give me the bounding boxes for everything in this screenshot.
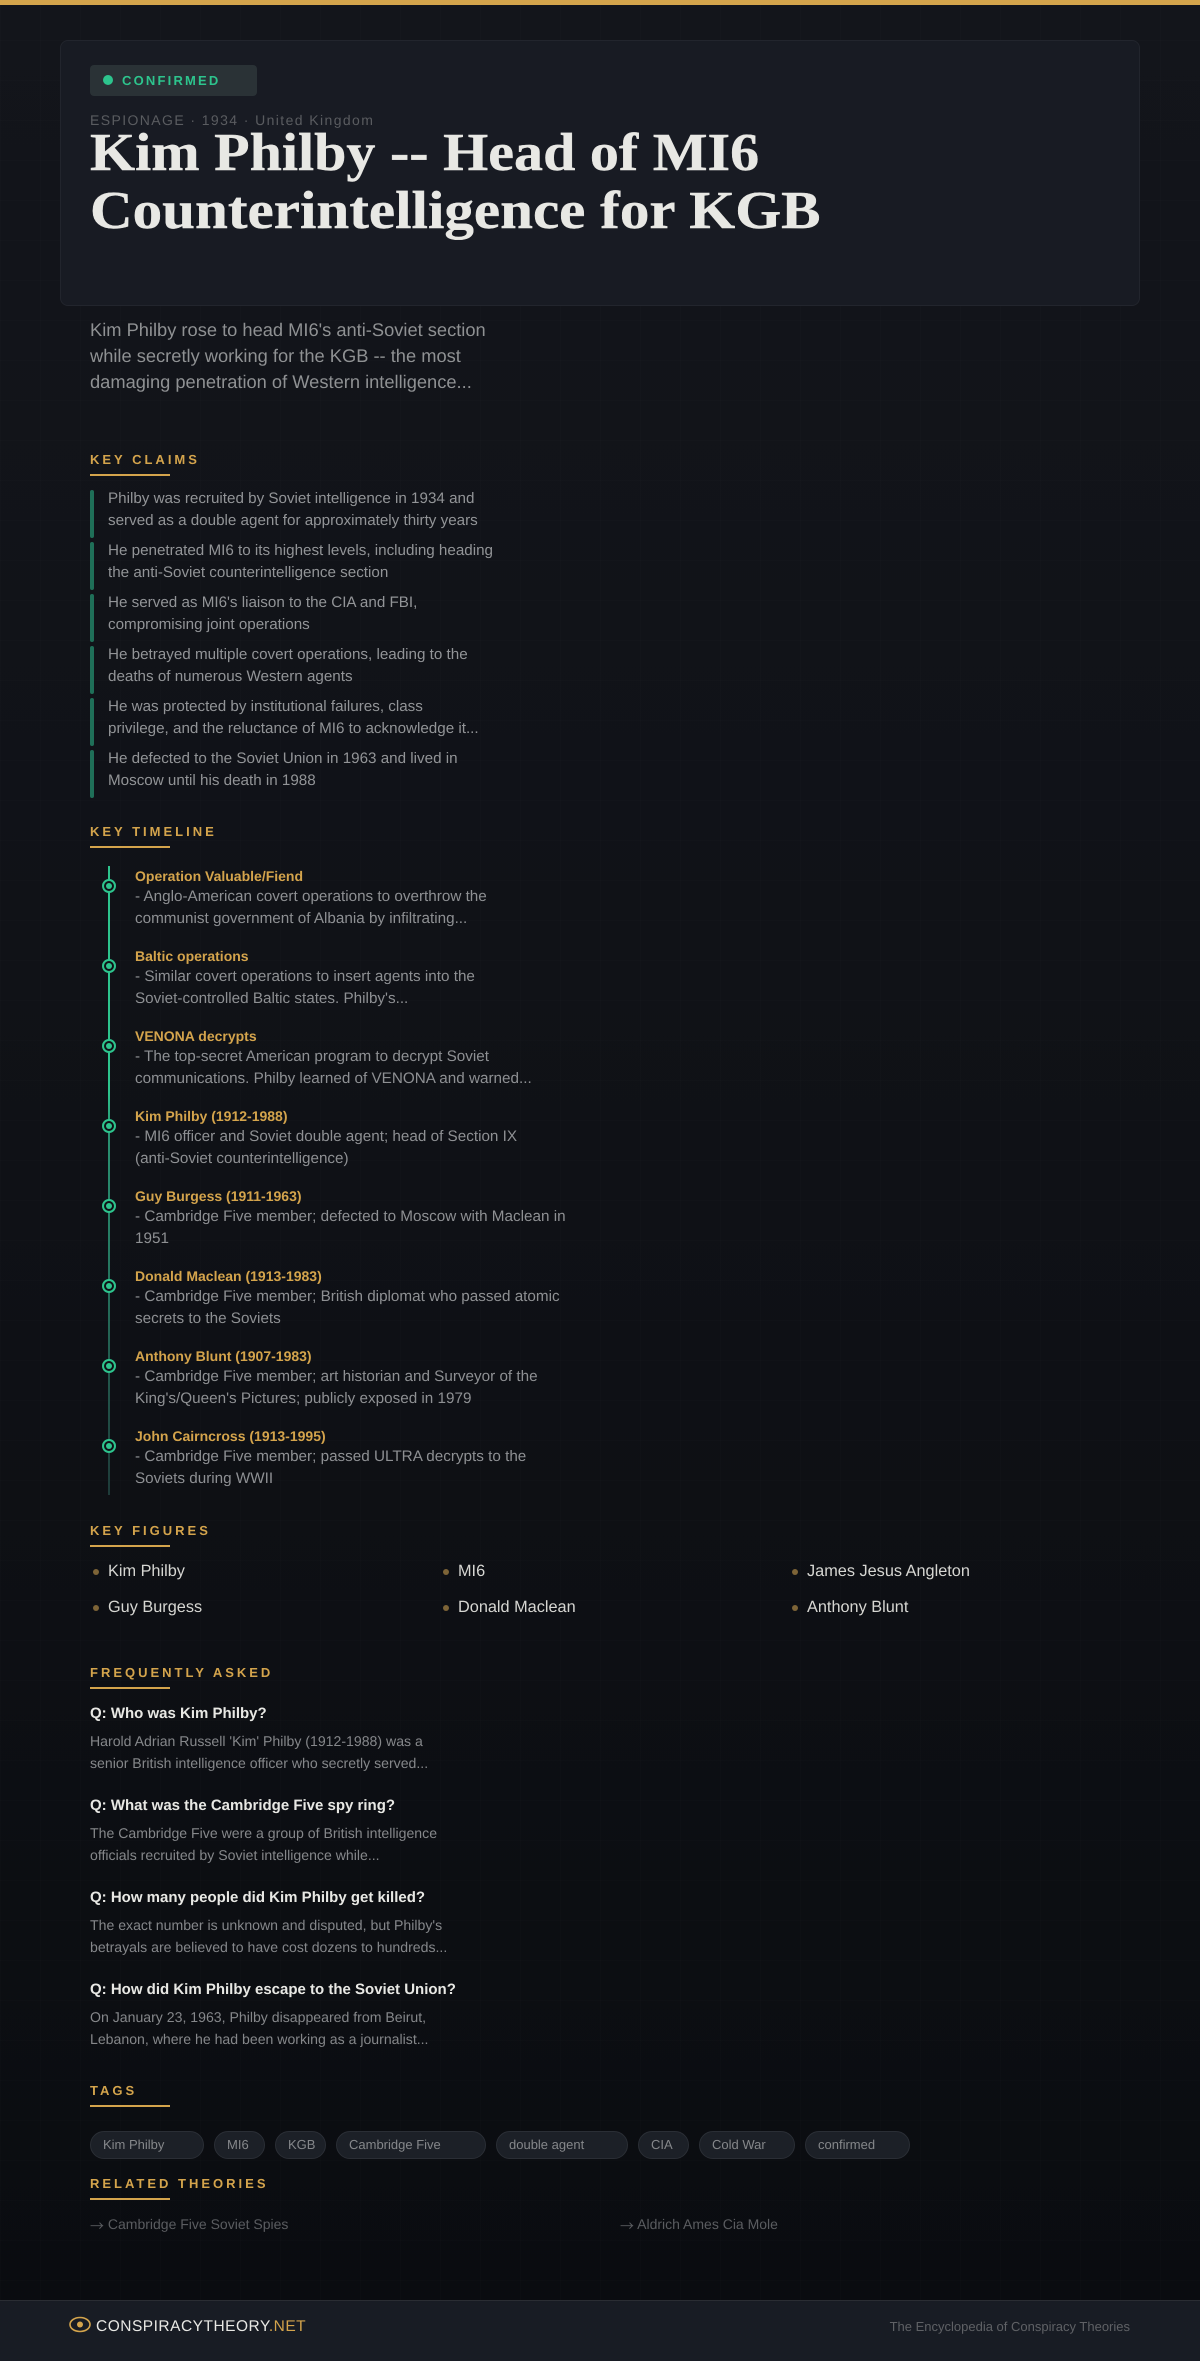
intro summary: Kim Philby rose to head MI6's anti-Soviet section <box>90 319 486 340</box>
title: Kim Philby -- Head of MI6 <box>90 122 759 182</box>
question 4: On January 23, 1963, Philby disappeared from Beirut, <box>90 2009 426 2025</box>
claim 2: the anti-Soviet counterintelligence section <box>108 564 388 581</box>
event 4 <box>135 1108 517 1167</box>
tag <box>805 2131 910 2159</box>
claim 1: Philby was recruited by Soviet intelligence in 1934 and <box>108 490 474 507</box>
panel: header <box>60 40 1140 306</box>
tag: CIA <box>651 2137 673 2152</box>
question 1: senior British intelligence officer who secretly served... <box>90 1755 428 1771</box>
claim 6: He defected to the Soviet Union in 1963 and lived in <box>108 750 458 767</box>
event 7: - Cambridge Five member; art historian and Surveyor of the <box>135 1368 538 1385</box>
question 1: Q: Who was Kim Philby? <box>90 1705 267 1722</box>
tag <box>699 2131 795 2159</box>
event 7 <box>135 1348 538 1407</box>
claim 2 <box>90 542 493 590</box>
event 7: Anthony Blunt (1907-1983) <box>135 1348 312 1364</box>
event 6: - Cambridge Five member; British diplomat who passed atomic <box>135 1288 560 1305</box>
footer <box>0 2300 1200 2361</box>
event 1 <box>135 868 487 927</box>
node 4 <box>102 1119 116 1133</box>
timeline <box>102 866 566 1495</box>
question 3: The exact number is unknown and disputed, but Philby's <box>90 1917 442 1933</box>
claim 5: He was protected by institutional failures, class <box>108 698 423 715</box>
event 6: Donald Maclean (1913-1983) <box>135 1268 322 1284</box>
panel: key claims list <box>90 490 493 798</box>
event 3: VENONA decrypts <box>135 1028 257 1044</box>
tag <box>275 2131 326 2159</box>
tag: Kim Philby <box>103 2137 164 2152</box>
tag: confirmed <box>818 2137 875 2152</box>
event 5: - Cambridge Five member; defected to Moscow with Maclean in <box>135 1208 566 1225</box>
figure: Kim Philby: Kim Philby <box>108 1562 185 1580</box>
event 7: King's/Queen's Pictures; publicly exposed in 1979 <box>135 1390 471 1407</box>
event 3: communications. Philby learned of VENONA and warned... <box>135 1070 532 1087</box>
claim 5: privilege, and the reluctance of MI6 to acknowledge it... <box>108 720 479 737</box>
question 3: Q: How many people did Kim Philby get killed? <box>90 1889 425 1906</box>
badge label: CONFIRMED <box>122 73 221 88</box>
question 2: The Cambridge Five were a group of British intelligence <box>90 1825 437 1841</box>
node 6 <box>102 1279 116 1293</box>
tag: MI6 <box>227 2137 249 2152</box>
question 1 <box>90 1705 428 1771</box>
node 5 <box>102 1199 116 1213</box>
intro summary: while secretly working for the KGB -- the most <box>90 345 461 366</box>
claim 5 <box>90 698 479 746</box>
tag: Cambridge Five <box>349 2137 441 2152</box>
node 1 <box>102 879 116 893</box>
event 6 <box>135 1268 560 1327</box>
claim 1 <box>90 490 478 538</box>
event 8: - Cambridge Five member; passed ULTRA decrypts to the <box>135 1448 526 1465</box>
related link: Cambridge Five Soviet Spies: → Cambridge Five Soviet Spies <box>90 2216 288 2236</box>
tag list <box>90 2131 910 2159</box>
claim 4: deaths of numerous Western agents <box>108 668 353 685</box>
event 2: - Similar covert operations to insert agents into the <box>135 968 475 985</box>
event 3 <box>135 1028 532 1087</box>
tag: double agent <box>509 2137 584 2152</box>
node 2 <box>102 959 116 973</box>
claim 3: compromising joint operations <box>108 616 310 633</box>
event 8: John Cairncross (1913-1995) <box>135 1428 326 1444</box>
title: Counterintelligence for KGB <box>90 180 821 240</box>
claim 3 <box>90 594 417 642</box>
event 6: secrets to the Soviets <box>135 1310 281 1327</box>
event 1: - Anglo-American covert operations to overthrow the <box>135 888 487 905</box>
question 3 <box>90 1889 447 1955</box>
icon: eye logo <box>69 2316 91 2332</box>
question 2 <box>90 1797 437 1863</box>
event 8: Soviets during WWII <box>135 1470 273 1487</box>
figure: MI6: MI6 <box>458 1562 485 1580</box>
timeline rail <box>108 866 110 1495</box>
event 3: - The top-secret American program to decrypt Soviet <box>135 1048 489 1065</box>
heading: key figures: KEY FIGURES <box>90 1523 211 1538</box>
question 4 <box>90 1981 456 2047</box>
event 5 <box>135 1188 566 1247</box>
tag <box>336 2131 486 2159</box>
question 1: Harold Adrian Russell 'Kim' Philby (1912-1988) was a <box>90 1733 423 1749</box>
footer tagline: The Encyclopedia of Conspiracy Theories <box>890 2319 1130 2334</box>
claim 4 <box>90 646 468 694</box>
question 4: Q: How did Kim Philby escape to the Soviet Union? <box>90 1981 456 1998</box>
heading: key timeline: KEY TIMELINE <box>90 824 217 839</box>
event 4: Kim Philby (1912-1988) <box>135 1108 288 1124</box>
node 7 <box>102 1359 116 1373</box>
event 1: Operation Valuable/Fiend <box>135 868 303 884</box>
heading: tags: TAGS <box>90 2083 137 2098</box>
tag <box>214 2131 265 2159</box>
claim 6: Moscow until his death in 1988 <box>108 772 316 789</box>
title <box>90 122 821 240</box>
event 4: (anti-Soviet counterintelligence) <box>135 1150 349 1167</box>
figure: Guy Burgess: Guy Burgess <box>108 1598 202 1616</box>
claim 6 <box>90 750 458 798</box>
event 5: Guy Burgess (1911-1963) <box>135 1188 302 1204</box>
event 1: communist government of Albania by infiltrating... <box>135 910 467 927</box>
claim 4: He betrayed multiple covert operations, leading to the <box>108 646 468 663</box>
icon: status dot <box>103 75 113 85</box>
question 4: Lebanon, where he had been working as a journalist... <box>90 2031 428 2047</box>
faq list <box>90 1705 456 2047</box>
node 3 <box>102 1039 116 1053</box>
tag <box>638 2131 689 2159</box>
event 2 <box>135 948 475 1007</box>
logo wordmark: CONSPIRACYTHEORY.NET <box>96 2318 306 2335</box>
heading: key claims: KEY CLAIMS <box>90 452 200 467</box>
tag <box>496 2131 628 2159</box>
heading: related theories: RELATED THEORIES <box>90 2176 268 2191</box>
claim 1: served as a double agent for approximately thirty years <box>108 512 478 529</box>
figure: James Jesus Angleton: James Jesus Angleton <box>807 1562 970 1580</box>
top accent bar <box>0 0 1200 5</box>
heading: frequently asked: FREQUENTLY ASKED <box>90 1665 273 1680</box>
event 8 <box>135 1428 526 1487</box>
figure: Anthony Blunt: Anthony Blunt <box>807 1598 908 1616</box>
event 5: 1951 <box>135 1230 169 1247</box>
intro summary <box>90 319 486 392</box>
question 2: officials recruited by Soviet intelligence while... <box>90 1847 380 1863</box>
event 4: - MI6 officer and Soviet double agent; head of Section IX <box>135 1128 517 1145</box>
event 2: Baltic operations <box>135 948 249 964</box>
node 8 <box>102 1439 116 1453</box>
claim 2: He penetrated MI6 to its highest levels, including heading <box>108 542 493 559</box>
status badge: confirmed <box>90 65 257 96</box>
figure: MI6 <box>443 1562 485 1580</box>
tag: KGB <box>288 2137 315 2152</box>
question 3: betrayals are believed to have cost dozens to hundreds... <box>90 1939 447 1955</box>
related link: Aldrich Ames Cia Mole: → Aldrich Ames Cia Mole <box>620 2216 778 2236</box>
claim 3: He served as MI6's liaison to the CIA and FBI, <box>108 594 417 611</box>
figure: Donald Maclean: Donald Maclean <box>458 1598 576 1616</box>
event 2: Soviet-controlled Baltic states. Philby's... <box>135 990 408 1007</box>
category meta line: ESPIONAGE · 1934 · United Kingdom <box>90 112 374 128</box>
tag: Cold War <box>712 2137 766 2152</box>
key figures grid <box>93 1562 970 1616</box>
question 2: Q: What was the Cambridge Five spy ring? <box>90 1797 395 1814</box>
intro summary: damaging penetration of Western intelligence... <box>90 371 472 392</box>
tag <box>90 2131 204 2159</box>
